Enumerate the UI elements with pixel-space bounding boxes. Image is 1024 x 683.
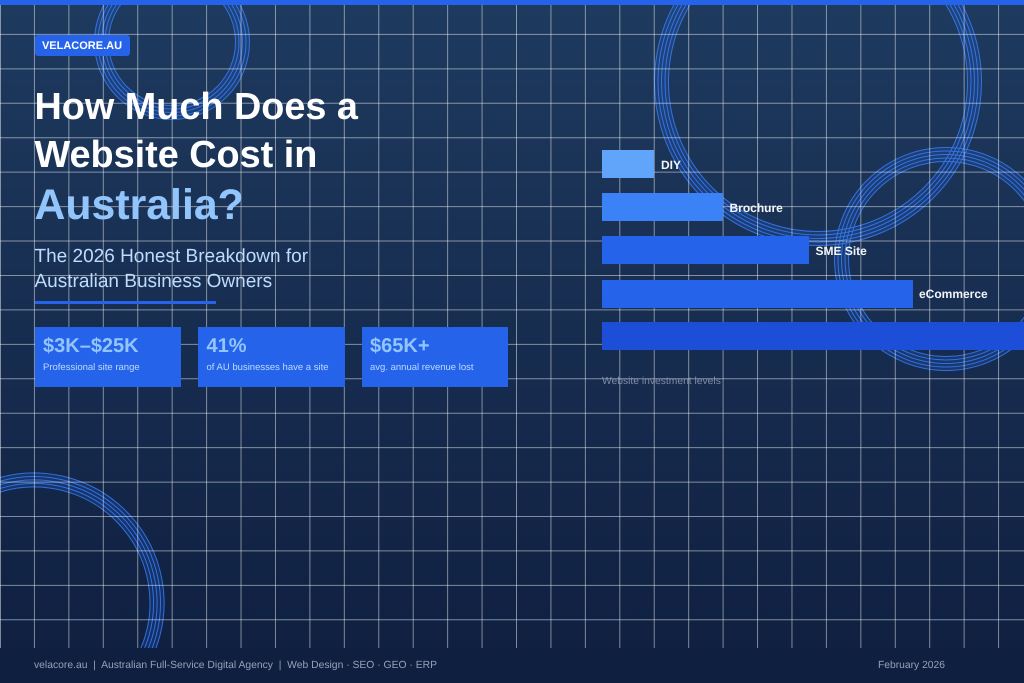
stat: revenue lost: avg. annual revenue lost [370, 362, 474, 373]
subtitle: The 2026 Honest Breakdown for [34, 246, 308, 266]
footer band [0, 648, 1024, 683]
top accent bar [0, 0, 1024, 4]
stat: AU businesses with a site: 41% [206, 335, 247, 357]
bar: eCommerce [602, 280, 912, 308]
title: How Much Does a [34, 86, 358, 128]
footer left text: velacore.au | Australian Full-Service Digital Agency | Web Design · SEO · GEO · ERP [34, 660, 437, 671]
subtitle: Australian Business Owners [34, 270, 272, 292]
stat: professional site range: Professional site range [43, 362, 140, 373]
title: Australia? [34, 181, 244, 229]
bar: largest level [602, 322, 1024, 350]
stat: AU businesses with a site: of AU businesses have a site [206, 362, 328, 373]
bar: SME Site [602, 236, 809, 264]
label: Brochure: Brochure [730, 200, 783, 214]
accent rule [34, 301, 216, 304]
bar: Brochure [602, 193, 723, 221]
brand badge: VELACORE.AU [42, 40, 122, 52]
label: DIY: DIY [661, 158, 681, 172]
stat: AU businesses with a site [198, 327, 344, 387]
title [34, 86, 358, 229]
label: eCommerce: eCommerce [919, 286, 988, 300]
stat: professional site range [34, 327, 181, 387]
bar chart: website investment levels [602, 150, 1024, 386]
label: SME Site: SME Site [816, 244, 867, 258]
stat: professional site range: $3K–$25K [43, 335, 139, 357]
chart caption: Website investment levels [602, 376, 721, 386]
footer date: February 2026 [878, 660, 945, 671]
brand badge [34, 35, 130, 56]
subtitle [34, 246, 308, 292]
stat: revenue lost: $65K+ [370, 335, 430, 357]
stat: revenue lost [362, 327, 508, 387]
title: Website Cost in [34, 134, 317, 176]
bar: DIY [602, 150, 654, 178]
